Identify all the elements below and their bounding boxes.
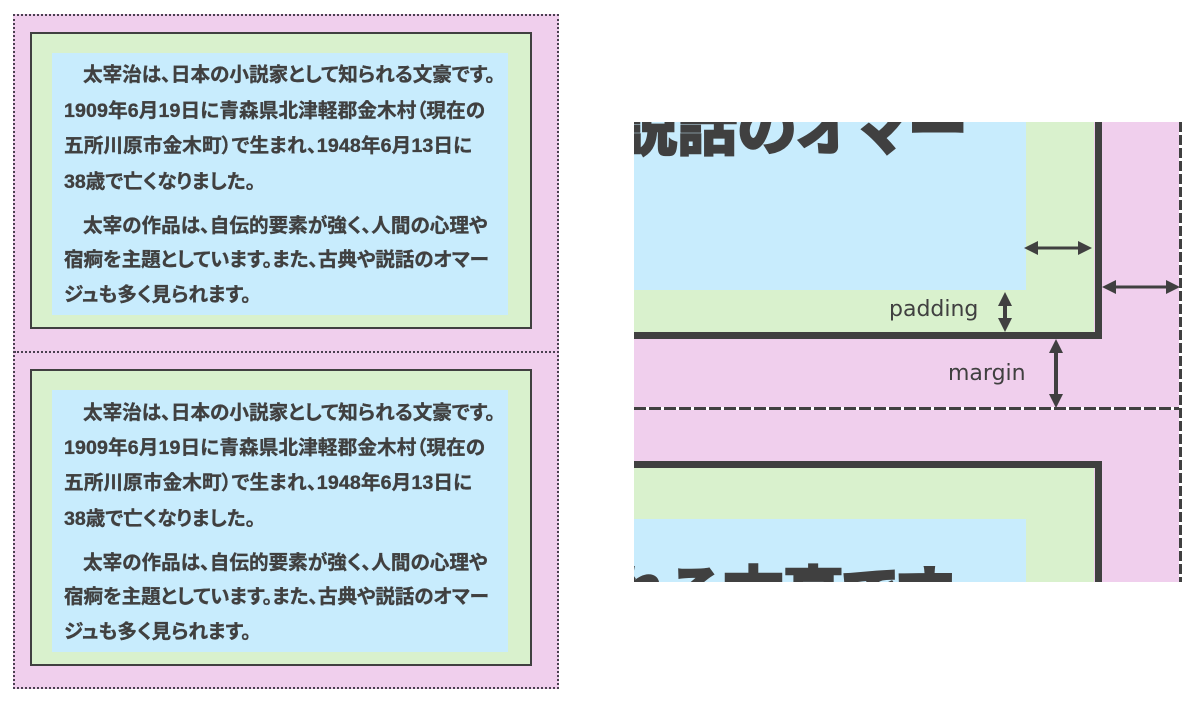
arrow: margin right [1102,280,1180,294]
paragraph 1 text [64,64,495,306]
divider: margin boundary between paragraphs [14,351,559,353]
detail: dashed margin line vertical [1179,122,1182,582]
paragraph 1 text: 38歳で亡くなりました。 [64,171,255,193]
arrow: padding right [1024,241,1092,255]
detail: upper border [614,114,1102,339]
paragraph 1 text: 太宰の作品は、自伝的要素が強く、人間の心理や [83,215,487,237]
label: padding: padding [889,297,978,322]
panel: enlarged detail of margin and padding [634,122,1183,582]
label: margin: margin [948,361,1026,386]
detail: lower border [624,461,1102,661]
paragraph 2 text: 太宰治は、日本の小説家として知られる文豪です。 [83,402,495,424]
paragraph 2 text: 1909年6月19日に青森県北津軽郡金木村（現在の [64,437,485,459]
arrow: margin bottom [1049,339,1063,408]
content area 1 [52,53,508,315]
paragraph 2 text: 五所川原市金木町）で生まれ、1948年6月13日に [64,472,472,494]
arrow: padding bottom [998,292,1012,332]
detail: upper green padding area [634,122,1094,332]
paragraph 1 text: 太宰治は、日本の小説家として知られる文豪です。 [83,64,495,86]
content area 2 [52,390,508,652]
paragraph 1 text: 宿痾を主題としています。また、古典や説話のオマー [64,249,489,271]
white strip outside edge [1182,122,1183,582]
paragraph 2 text: 宿痾を主題としています。また、古典や説話のオマー [64,586,489,608]
panel: full box model example with two paragraphs [13,14,559,689]
paragraph 1 text: ジュも多く見られます。 [64,284,251,306]
paragraph box 1 [30,32,532,329]
paragraph 2 text [64,402,495,643]
detail: upper blue content area [634,122,1026,290]
detail: dashed margin line horizontal [634,407,1182,410]
paragraph 2 text: ジュも多く見られます。 [64,621,251,643]
paragraph 2 text: 太宰の作品は、自伝的要素が強く、人間の心理や [83,552,487,574]
paragraph 2 text: 38歳で亡くなりました。 [64,508,255,530]
paragraph 1 text: 五所川原市金木町）で生まれ、1948年6月13日に [64,135,472,157]
paragraph 1 text: 1909年6月19日に青森県北津軽郡金木村（現在の [64,100,485,122]
paragraph box 2 [30,369,532,666]
detail: lower green padding area [634,468,1094,588]
detail: lower blue content area [634,519,1026,589]
